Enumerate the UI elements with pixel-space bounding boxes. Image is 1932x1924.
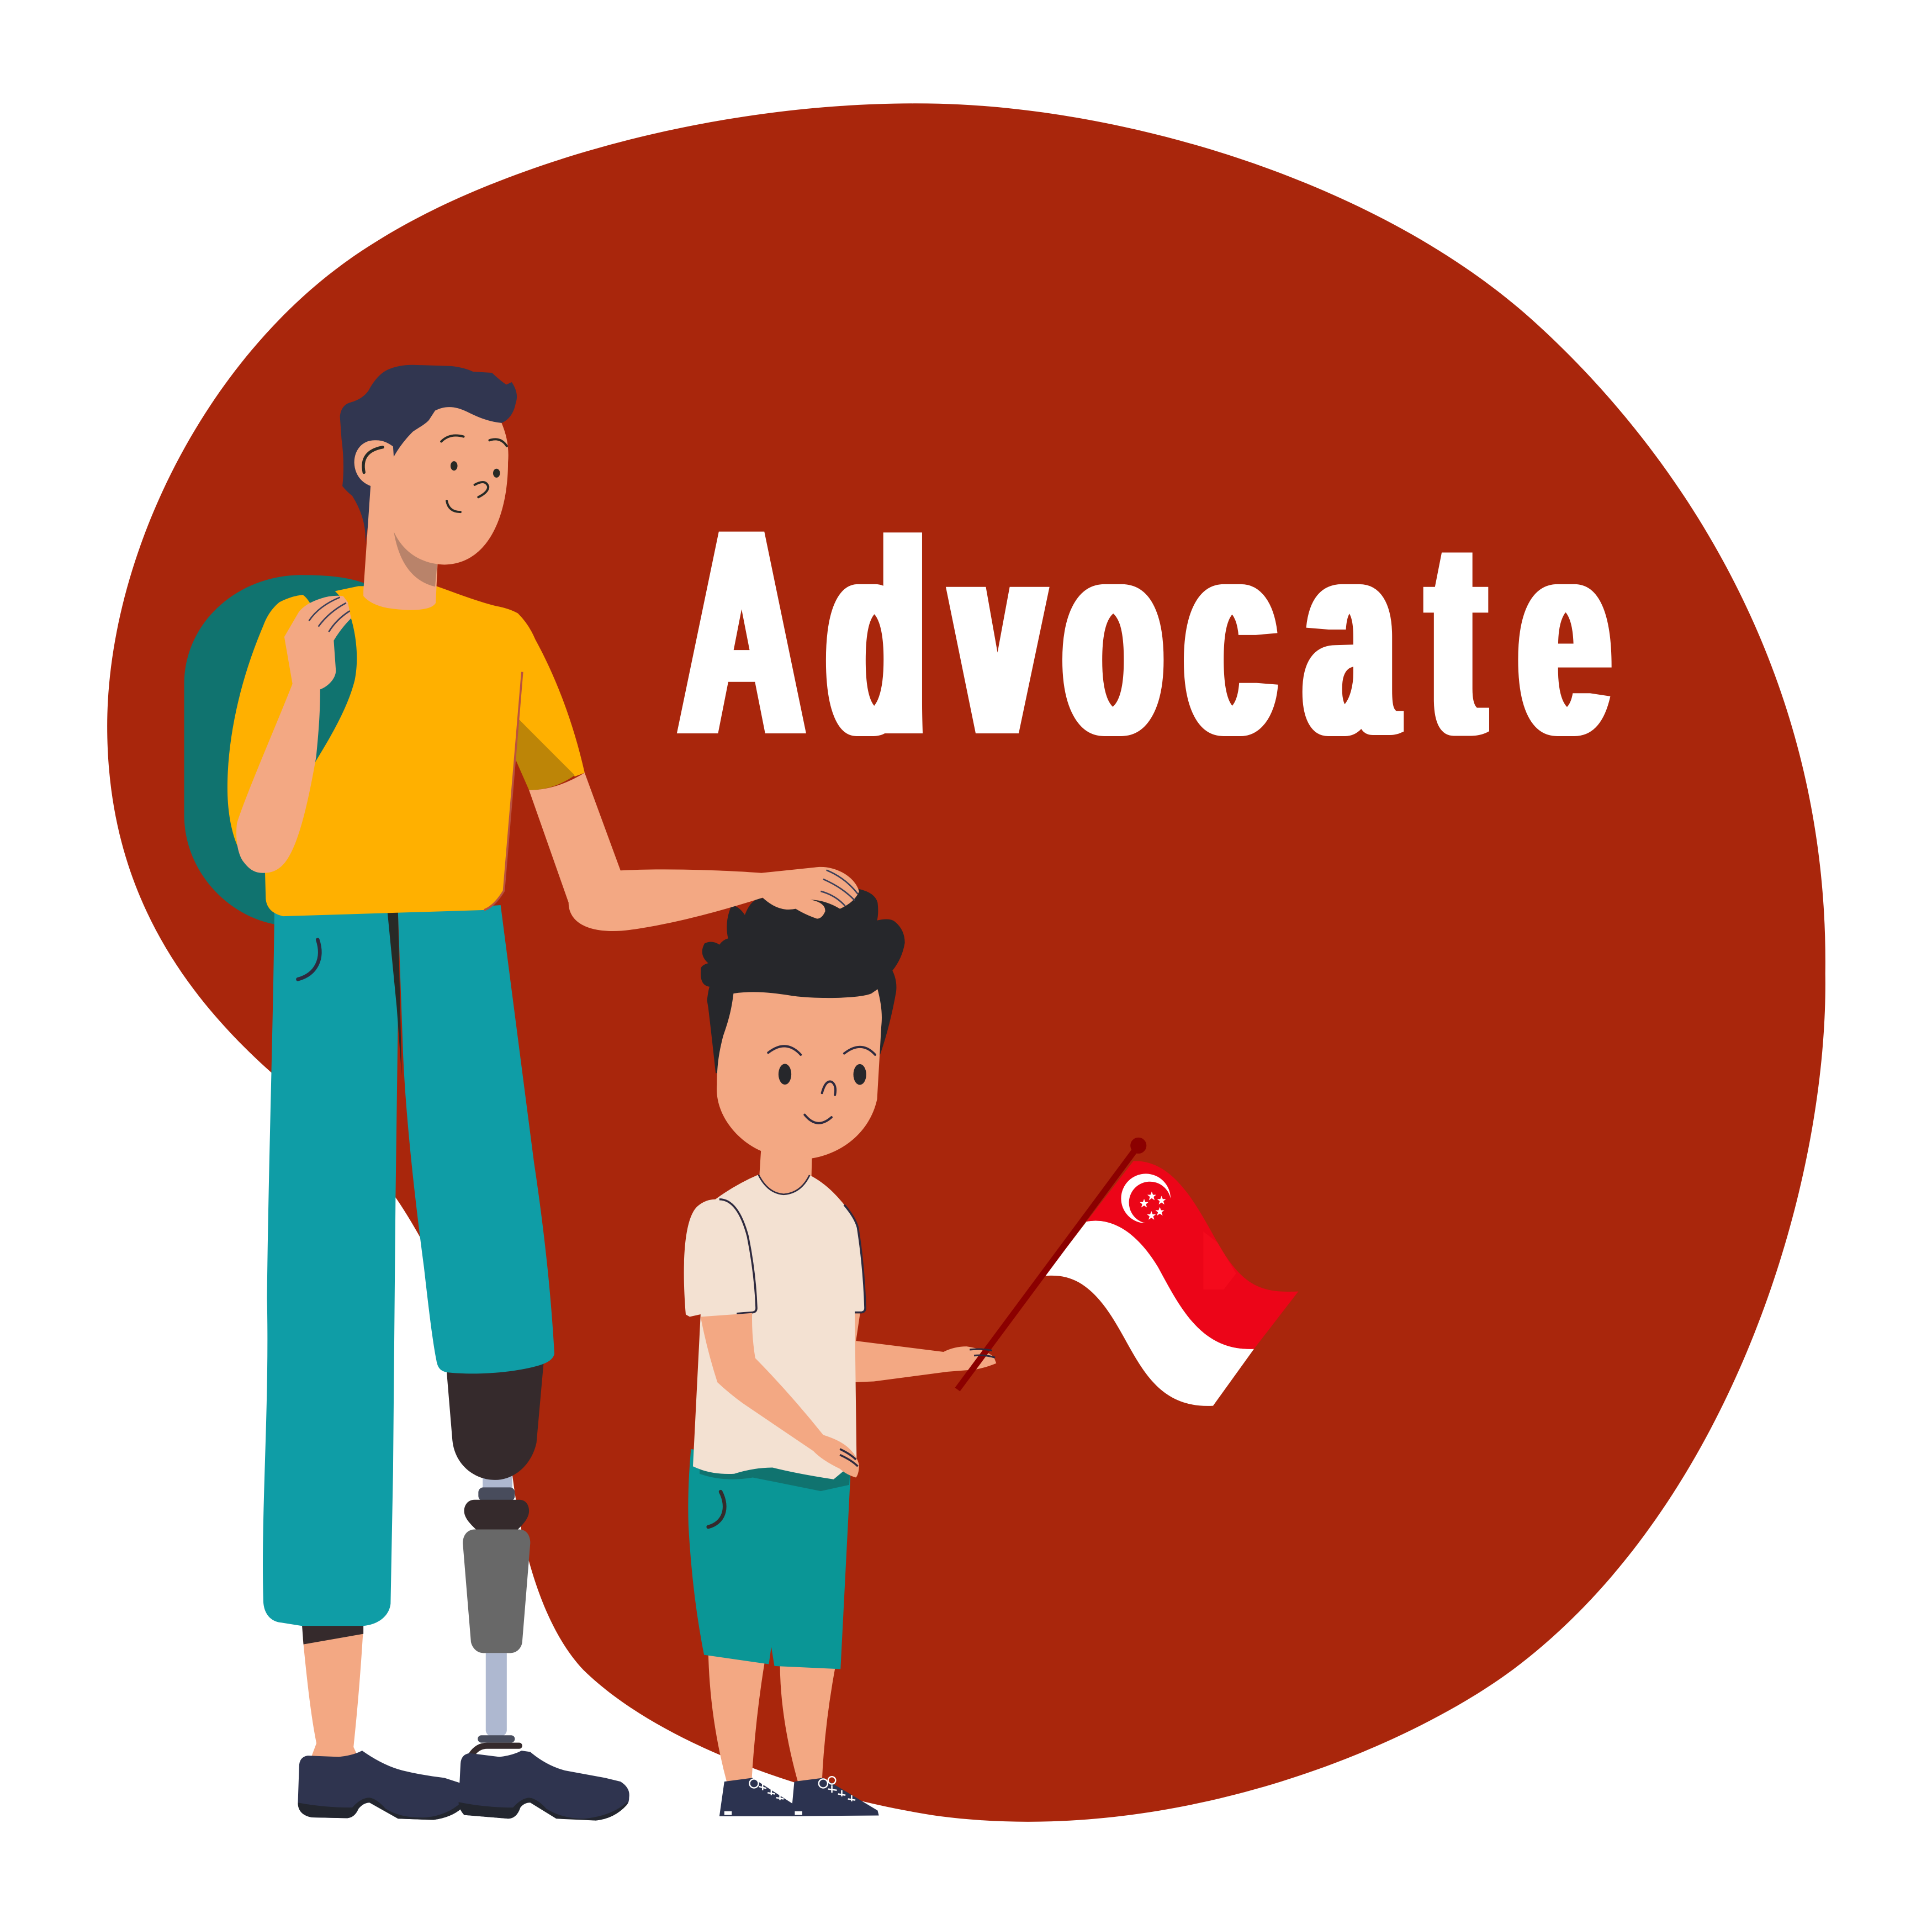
upper collar [478, 1487, 515, 1501]
man's facial features [363, 436, 507, 512]
forearm and hand [529, 773, 859, 931]
left sneaker [719, 1778, 795, 1816]
right sole [459, 1798, 628, 1821]
raised arm gripping strap [236, 596, 351, 873]
waistband shadow [700, 1459, 850, 1491]
trouser gap [388, 912, 402, 1076]
boy's lowered arm [701, 1313, 859, 1477]
neck shadow [394, 532, 437, 586]
right sneaker [791, 1778, 879, 1816]
crescent [1121, 1174, 1171, 1223]
sneaker sole marks [724, 1811, 732, 1815]
left sole [298, 1798, 461, 1820]
man's neck [363, 470, 437, 610]
strap hand finger lines [309, 598, 350, 632]
hand finger lines [821, 870, 858, 906]
shorts pocket [708, 1492, 724, 1527]
sneaker laces [749, 1777, 855, 1801]
shirt side seam [484, 672, 522, 910]
boy's neck [758, 1144, 812, 1202]
boy's shoes [719, 1777, 879, 1816]
boy's face [717, 989, 882, 1159]
boy's facial features [768, 1046, 875, 1123]
yellow shirt [264, 586, 585, 916]
boy's legs [708, 1651, 765, 1784]
prosthetic leg [463, 1471, 530, 1756]
ankle ring [471, 1746, 519, 1756]
boy holding flag [684, 889, 1298, 1816]
knee joint [464, 1500, 529, 1529]
flag hand finger lines [970, 1349, 995, 1357]
t-shirt outlines [719, 1175, 865, 1314]
outstretched arm [851, 1312, 996, 1382]
lower collar [478, 1735, 515, 1743]
boy's t-shirt [684, 1175, 865, 1479]
backpack [184, 575, 371, 925]
right trouser leg [398, 905, 554, 1373]
sock [301, 1620, 363, 1645]
right leg skin [303, 1626, 363, 1763]
man's ear [354, 440, 395, 487]
boy's hair [701, 889, 905, 1073]
lower pole [486, 1653, 507, 1737]
boy's shorts [688, 1449, 850, 1669]
left sleeve [227, 595, 324, 846]
trouser pocket [298, 940, 320, 979]
man's hair [340, 365, 517, 544]
man's face [389, 407, 509, 564]
man's arm resting on boy's head [529, 773, 859, 931]
pole knob [1130, 1138, 1146, 1154]
flag pole [957, 1145, 1139, 1389]
left trouser leg [263, 912, 398, 1626]
shoes [298, 1751, 629, 1821]
five stars [1140, 1192, 1166, 1220]
socket [463, 1529, 530, 1653]
prosthetic upper pole [483, 1471, 512, 1491]
heading: Advocate: Advocate [681, 468, 1608, 796]
sleeve shadow [515, 720, 575, 790]
left shoe [298, 1751, 463, 1820]
lowered hand finger lines [840, 1449, 858, 1466]
man with prosthetic leg [184, 365, 629, 1821]
flag highlight [1203, 1231, 1236, 1289]
red band [1087, 1161, 1298, 1349]
red background blob [107, 103, 1825, 1822]
right shoe [459, 1751, 629, 1821]
Singapore flag [957, 1138, 1298, 1406]
white band [1045, 1220, 1254, 1406]
stump [446, 1360, 544, 1480]
figures [184, 365, 1298, 1821]
